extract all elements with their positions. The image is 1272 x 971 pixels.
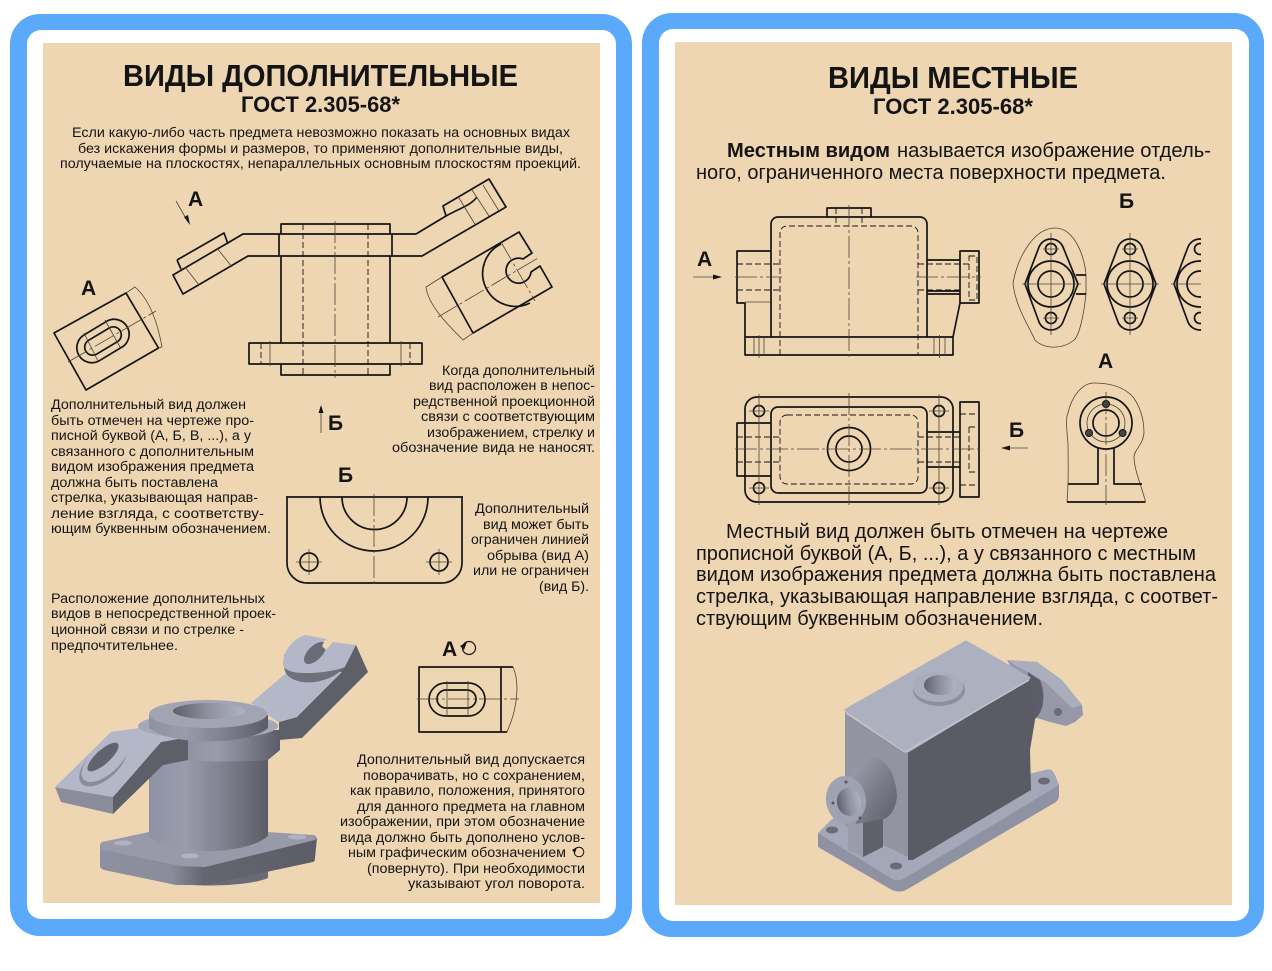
label: B at arrow: Б <box>328 412 343 435</box>
label: B local views: Б <box>1119 190 1134 213</box>
text block: definition: называется изображение отдель- <box>897 139 1211 162</box>
text block: definition <box>696 139 1211 184</box>
label: B at view: Б <box>338 464 353 487</box>
text block: break line note: или не ограничен <box>473 563 589 579</box>
text block: marking rule: ющим буквенным обозначением. <box>51 521 271 537</box>
arrow: view A <box>693 274 722 280</box>
text block: break line note: вид может быть <box>483 517 589 533</box>
text block: intro: без искажения формы и размеров, то применяют дополнительные виды, <box>78 141 563 157</box>
label: A at view: А <box>81 277 96 300</box>
text block: direct projection rule <box>392 363 595 456</box>
drawing: additional view B <box>286 494 463 586</box>
text block: marking rule: Местный вид должен быть отмечен на чертеже <box>726 520 1168 543</box>
text block: direct projection rule: изображением, стрелку и <box>427 425 595 441</box>
text block: marking rule <box>51 397 271 537</box>
text block: intro: получаемые на плоскостях, непараллельных основным плоскостям проекций. <box>60 156 581 172</box>
text block: rotation rule: изображении, при этом обозначение <box>340 814 585 830</box>
text block: rotation rule: Дополнительный вид допускается <box>357 752 585 768</box>
panel: additional views (left poster) <box>10 14 632 936</box>
text block: definition: ного, ограниченного места поверхности предмета. <box>696 161 1166 184</box>
text block: intro <box>60 125 581 172</box>
text block: preferred placement: Расположение дополнительных <box>51 591 265 607</box>
text block: marking rule: видом изображения предмета должна быть поставлена <box>696 563 1217 586</box>
label: A at arrow: А <box>188 188 203 211</box>
arrow: view B direction <box>318 405 324 433</box>
text block: preferred placement: предпочтительнее. <box>51 638 178 654</box>
text block: marking rule: стрелка, указывающая направ- <box>51 490 258 506</box>
title: additional views: ВИДЫ ДОПОЛНИТЕЛЬНЫЕ <box>123 58 518 93</box>
text block: direct projection rule: Когда дополнительный <box>442 363 595 379</box>
text block: marking rule: видом изображения предмета <box>51 459 254 475</box>
drawing: local view B clipped <box>1171 238 1201 331</box>
text block: rotation rule <box>340 752 585 892</box>
arrow: view A direction <box>176 201 190 225</box>
text block: marking rule: ствующим буквенным обозначением. <box>696 607 1043 630</box>
label: rotated view A with symbol <box>442 638 476 661</box>
drawing: front view of housing <box>735 205 981 358</box>
drawing: top view of housing <box>735 393 982 505</box>
drawing: main view of the part <box>173 179 506 378</box>
text block: break line note: Дополнительный <box>475 501 589 517</box>
drawing: local view B without outline <box>1101 233 1159 335</box>
text block: direct projection rule: вид расположен в непос- <box>429 378 595 394</box>
icon: rotated symbol <box>572 847 584 857</box>
drawing: rotated view A <box>417 667 519 732</box>
text block: direct projection rule: обозначение вида не наносят. <box>392 440 595 456</box>
text block: preferred placement: видов в непосредственной проек- <box>51 606 276 622</box>
panel: local views (right poster) <box>642 13 1264 937</box>
text block: rotation rule: для данного предмета на главном <box>357 799 585 815</box>
3D model: part with tilted arms <box>55 635 368 886</box>
text block: break line note <box>471 501 589 595</box>
text block: marking rule: стрелка, указывающая направление взгляда, с соответ- <box>696 585 1218 608</box>
text block: marking rule: связанного с дополнительным <box>51 444 254 460</box>
text block: direct projection rule: редственной проекционной <box>413 394 595 410</box>
label: rotated view A with symbol: А <box>442 638 457 661</box>
subtitle: standard reference: ГОСТ 2.305-68* <box>241 92 400 117</box>
label: B: Б <box>1009 419 1024 442</box>
label: A local view: А <box>1098 350 1113 373</box>
subtitle: standard reference: ГОСТ 2.305-68* <box>873 94 1033 119</box>
text block: marking rule: писной буквой (А, Б, В, ...), а у <box>51 428 252 444</box>
arrow: view B <box>1001 446 1028 450</box>
text block: break line note: (вид Б). <box>539 579 589 595</box>
text block: break line note: ограничен линией <box>471 532 589 548</box>
drawing: tilted view with slot <box>426 232 552 340</box>
text block: marking rule: должна быть поставлена <box>51 475 218 491</box>
text block: rotation rule: поворачивать, но с сохранением, <box>363 768 585 784</box>
text block: marking rule: прописной буквой (А, Б, ...), а у связанного с местным <box>696 542 1196 565</box>
text block: rotation rule: (повернуто). При необходимости <box>367 861 585 877</box>
drawing: local view A <box>1066 383 1146 505</box>
text block: marking rule: ление взгляда, с соответству- <box>51 506 264 522</box>
text block: marking rule: быть отмечен на чертеже про- <box>51 413 254 429</box>
text block: rotation rule: вида должно быть дополнено услов- <box>340 830 585 846</box>
text block: direct projection rule: связи с соответствующим <box>421 409 595 425</box>
label: A: А <box>697 248 712 271</box>
3D model: housing <box>818 642 1083 892</box>
text block: rotation rule: указывают угол поворота. <box>408 876 585 892</box>
text block: marking rule: Дополнительный вид должен <box>51 397 246 413</box>
text block: break line note: обрыва (вид А) <box>487 548 589 564</box>
text block: definition: Местным видом <box>727 139 890 162</box>
drawing: additional view A <box>54 287 162 390</box>
text block: intro: Если какую-либо часть предмета невозможно показать на основных видах <box>72 125 570 141</box>
text block: marking rule <box>696 520 1218 630</box>
title: local views: ВИДЫ МЕСТНЫЕ <box>828 60 1078 95</box>
text block: preferred placement: ционной связи и по стрелке - <box>51 622 244 638</box>
text block: rotation rule: как правило, положения, принятого <box>350 783 585 799</box>
drawing: local view B with outline <box>1013 228 1086 347</box>
text block: rotation rule: ным графическим обозначением <box>348 845 566 861</box>
text block: preferred placement <box>51 591 276 654</box>
